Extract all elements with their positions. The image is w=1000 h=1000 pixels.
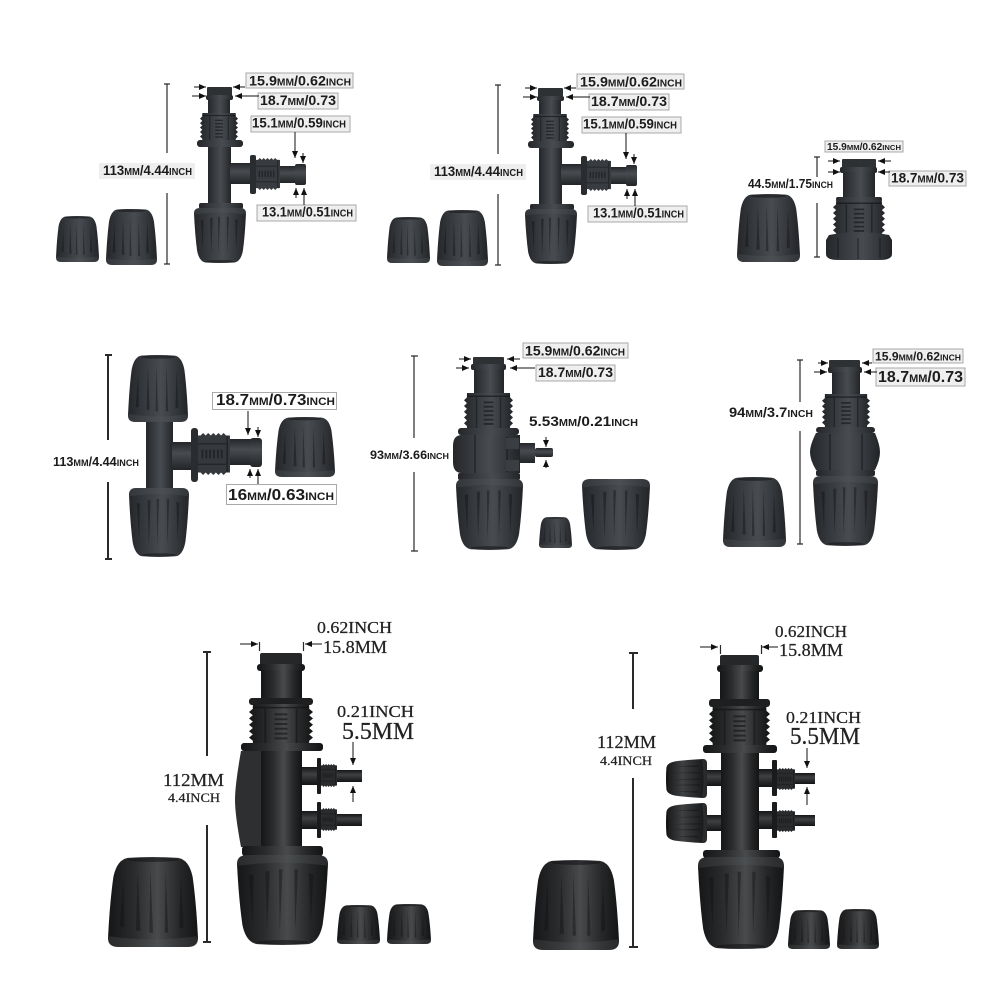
photo: cap bbox=[723, 477, 786, 547]
photo: large cap bbox=[533, 860, 619, 950]
label: overall height: 113MM/4.44INCH bbox=[53, 455, 139, 469]
label: 15.8mm: 15.8MM bbox=[323, 637, 387, 657]
label: overall height: 44.5MM/1.75INCH bbox=[748, 177, 833, 191]
height dimension line bbox=[629, 653, 638, 947]
dimension arrows bbox=[814, 363, 877, 372]
label: 112mm: 112MM bbox=[597, 732, 656, 752]
label: overall height: 113MM/4.44INCH bbox=[103, 162, 192, 178]
panel: tee with nuts on both ends bbox=[53, 355, 336, 559]
panel: manifold with capped outlets, lower right bbox=[533, 622, 879, 950]
dimension arrows bbox=[828, 161, 891, 172]
label: 5.5mm: 5.5MM bbox=[790, 724, 860, 750]
panel: threaded adapter with cap bbox=[737, 141, 966, 262]
photo: small cap 2 bbox=[387, 904, 431, 944]
panel: tee fitting with two caps, centre bbox=[387, 74, 687, 266]
panel: adapter with single outlet bbox=[370, 342, 650, 551]
dimension arrows bbox=[192, 87, 304, 205]
label: overall height: 93MM/3.66INCH bbox=[370, 448, 449, 462]
label: 15.9mm: 15.9MM/0.62INCH bbox=[875, 350, 961, 364]
height dimension line bbox=[203, 652, 211, 942]
label: 16mm: 16MM/0.63INCH bbox=[228, 487, 334, 504]
photo: cap bbox=[275, 417, 335, 477]
photo: small cap 1 bbox=[337, 905, 380, 944]
panel: inline adapter with cap bbox=[723, 349, 965, 547]
label: 18.7mm: 18.7MM/0.73 bbox=[260, 92, 336, 108]
photo: tee fitting and caps bbox=[56, 87, 306, 265]
label: 18.7mm: 18.7MM/0.73 bbox=[891, 170, 964, 186]
photo: small cap 1 bbox=[788, 910, 830, 949]
height dimension line bbox=[411, 356, 418, 551]
dimension arrows bbox=[700, 645, 807, 805]
dimension arrows bbox=[456, 359, 546, 468]
photo: inline adapter bbox=[810, 360, 880, 546]
panel: manifold with side block, lower left bbox=[108, 618, 431, 947]
photo: manifold bbox=[666, 655, 815, 949]
label: 18.7mm: 18.7MM/0.73 bbox=[591, 93, 667, 109]
photo: large cap bbox=[108, 857, 198, 947]
dimension arrows bbox=[523, 88, 635, 206]
dimension arrows bbox=[248, 411, 258, 484]
photo: tee fitting and caps bbox=[387, 88, 637, 266]
label: 13.1mm: 13.1MM/0.51INCH bbox=[593, 204, 684, 220]
photo: large cap bbox=[582, 479, 650, 550]
label: overall height: 94MM/3.7INCH bbox=[729, 404, 813, 420]
label: 15.9mm: 15.9MM/0.62INCH bbox=[525, 342, 625, 358]
photo: adapter with outlet bbox=[453, 357, 553, 550]
photo: small cap bbox=[539, 517, 572, 548]
label: 5.5mm: 5.5MM bbox=[342, 719, 414, 745]
photo: manifold bbox=[235, 653, 362, 945]
photo: cap bbox=[737, 194, 800, 262]
dimension arrows bbox=[240, 642, 353, 802]
label: 18.7mm: 18.7MM/0.73 bbox=[538, 364, 613, 380]
label: 15.9mm: 15.9MM/0.62INCH bbox=[249, 72, 351, 88]
label: 4.4 inch: 4.4INCH bbox=[168, 790, 220, 805]
label: overall height: 113MM/4.44INCH bbox=[434, 163, 523, 179]
photo: small cap 2 bbox=[837, 909, 879, 949]
photo: tee fitting bbox=[128, 355, 262, 557]
height dimension line bbox=[814, 157, 820, 257]
photo: threaded adapter bbox=[826, 159, 892, 260]
label: 13.1mm: 13.1MM/0.51INCH bbox=[262, 204, 353, 220]
label: 112mm: 112MM bbox=[163, 770, 224, 790]
label: 0.62 inch: 0.62INCH bbox=[775, 622, 847, 641]
label: 15.9mm: 15.9MM/0.62INCH bbox=[580, 74, 682, 90]
label: 5.53mm: 5.53 MM/0.21 INCH bbox=[529, 413, 638, 429]
height dimension line bbox=[164, 84, 170, 264]
label: 15.1mm: 15.1MM/0.59INCH bbox=[583, 116, 677, 132]
panel: tee fitting with two caps, left bbox=[56, 72, 356, 265]
height dimension line bbox=[797, 360, 803, 544]
label: 18.7mm: 18.7MM/0.73 bbox=[878, 369, 963, 386]
label: 0.21 inch: 0.21INCH bbox=[337, 702, 414, 721]
label: 0.21 inch: 0.21INCH bbox=[786, 708, 861, 727]
height dimension line bbox=[495, 85, 501, 265]
label: 15.1mm: 15.1MM/0.59INCH bbox=[252, 114, 346, 130]
height dimension line bbox=[105, 355, 112, 559]
label: 15.9mm: 15.9MM/0.62INCH bbox=[827, 142, 901, 153]
label: 0.62 inch: 0.62INCH bbox=[317, 618, 392, 637]
label: 18.7mm: 18.7MM/0.73INCH bbox=[216, 392, 335, 409]
label: 4.4 inch: 4.4INCH bbox=[600, 753, 652, 768]
label: 15.8mm: 15.8MM bbox=[779, 640, 843, 660]
